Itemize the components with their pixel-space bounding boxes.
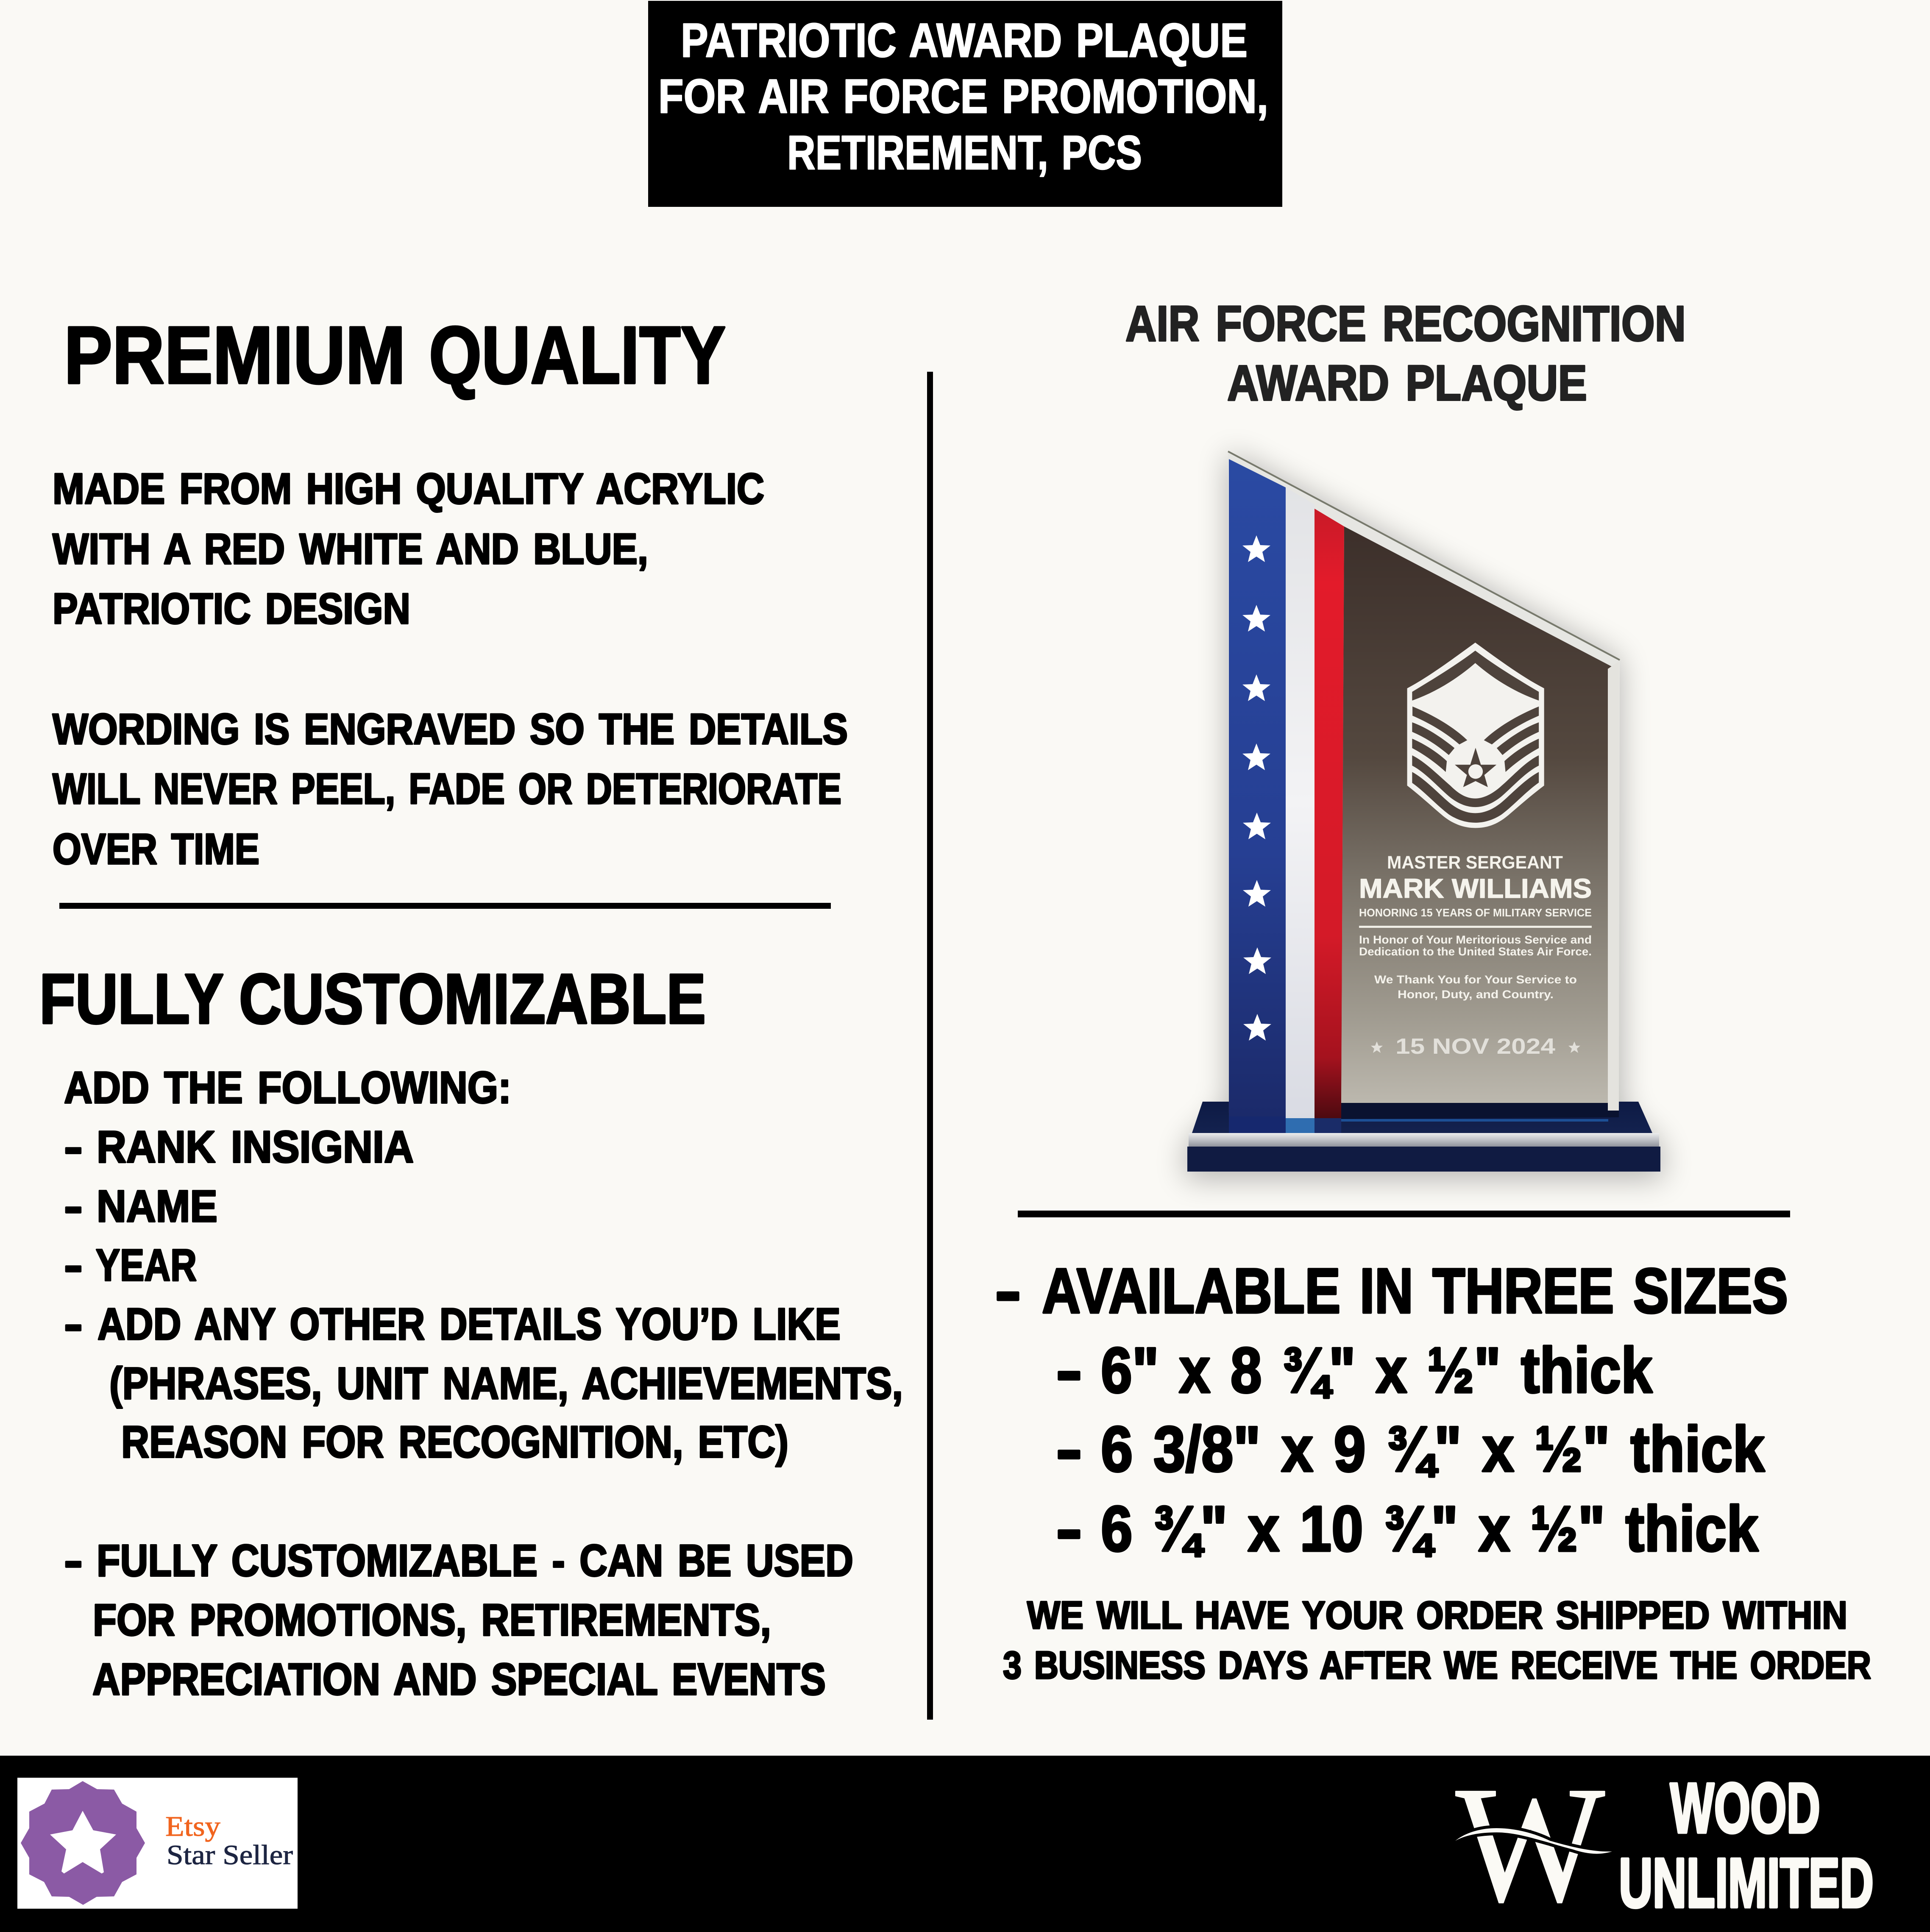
engraved text: In Honor of Your Meritorious Service and bbox=[1359, 933, 1592, 946]
text block: available sizes: 6 ¾" x 10 ¾" x ½" thick bbox=[1101, 1493, 1758, 1565]
icon: purple star badge bbox=[21, 1781, 145, 1905]
icon: serif W monogram: W bbox=[1456, 1752, 1606, 1932]
engraved text: HONORING 15 YEARS OF MILITARY SERVICE bbox=[1359, 906, 1592, 919]
text block: customization options: - bbox=[64, 1181, 83, 1231]
title banner: RETIREMENT, PCS bbox=[787, 126, 1142, 179]
wood unlimited logo bbox=[1455, 1752, 1874, 1932]
slanted top edge line bbox=[1228, 451, 1620, 660]
text block: customization options: REASON FOR RECOGNITION, ETC) bbox=[121, 1417, 788, 1467]
white stripe bbox=[1286, 487, 1315, 1118]
heading: premium quality bbox=[64, 309, 726, 401]
plaque base bbox=[1187, 1102, 1660, 1172]
text block: customization options: FULLY CUSTOMIZABLE - CAN BE USED bbox=[97, 1536, 853, 1586]
panel lower shadow gap bbox=[1341, 1103, 1619, 1119]
blue stripe bbox=[1229, 459, 1286, 1116]
star seller label: Star Seller bbox=[167, 1840, 293, 1871]
engraved text: Honor, Duty, and Country. bbox=[1398, 988, 1554, 1001]
red stripe bbox=[1315, 509, 1344, 1118]
etsy label: Etsy bbox=[165, 1811, 221, 1842]
engraved text: Dedication to the United States Air Force. bbox=[1359, 945, 1592, 958]
heading: premium quality: QUALITY bbox=[429, 309, 726, 401]
text block: customization options: ADD ANY OTHER DETAILS YOU’D LIKE bbox=[97, 1299, 841, 1349]
right edge highlight bbox=[1608, 661, 1619, 1111]
wordmark: WOOD bbox=[1670, 1769, 1820, 1848]
acrylic award plaque photo bbox=[1185, 451, 1664, 1178]
stars column bbox=[1242, 535, 1271, 1041]
engraved panel bbox=[1341, 526, 1614, 1103]
text block: available sizes: - bbox=[1056, 1334, 1082, 1406]
text block: material description: WILL NEVER PEEL, FADE OR DETERIORATE bbox=[53, 765, 841, 813]
engraved text bbox=[1359, 852, 1592, 1059]
heading: product name: AWARD PLAQUE bbox=[1227, 355, 1587, 411]
plaque shadow bbox=[1185, 451, 1664, 1178]
text block: material description: OVER TIME bbox=[53, 825, 259, 873]
heading: fully customizable: FULLY CUSTOMIZABLE bbox=[39, 960, 706, 1038]
text block: customization options: - bbox=[64, 1299, 83, 1349]
text block: available sizes: 6 3/8" x 9 ¾" x ½" thick bbox=[1101, 1413, 1765, 1485]
heading: product name bbox=[1125, 296, 1686, 411]
text block: customization options: NAME bbox=[97, 1181, 217, 1231]
text block: shipping note bbox=[1003, 1594, 1871, 1687]
text block: customization options bbox=[64, 1063, 903, 1704]
text block: available sizes: - bbox=[1056, 1493, 1082, 1565]
text block: material description bbox=[53, 465, 848, 873]
footer bar bbox=[0, 1756, 1930, 1932]
text block: shipping note: WE WILL HAVE YOUR ORDER SHIPPED WITHIN bbox=[1027, 1594, 1847, 1637]
text block: customization options: ADD THE FOLLOWING: bbox=[64, 1063, 511, 1113]
etsy star seller badge bbox=[17, 1778, 298, 1909]
text block: customization options: - bbox=[64, 1240, 83, 1290]
text block: available sizes: - bbox=[1056, 1413, 1082, 1485]
title banner bbox=[648, 1, 1282, 207]
engraved text: MARK WILLIAMS bbox=[1359, 873, 1592, 904]
engraved text: 15 NOV 2024 bbox=[1395, 1034, 1555, 1059]
text block: material description: PATRIOTIC DESIGN bbox=[53, 585, 410, 633]
text block: customization options: (PHRASES, UNIT NAME, ACHIEVEMENTS, bbox=[109, 1359, 903, 1409]
text block: customization options: FOR PROMOTIONS, RETIREMENTS, bbox=[93, 1595, 771, 1645]
rank insignia bbox=[1407, 643, 1544, 828]
acrylic silhouette bbox=[1228, 451, 1620, 1116]
text block: material description: WORDING IS ENGRAVED SO THE DETAILS bbox=[53, 705, 848, 753]
heading: premium quality: PREMIUM bbox=[64, 309, 406, 401]
text block: material description: WITH A RED WHITE AND BLUE, bbox=[53, 525, 648, 573]
engraved text: We Thank You for Your Service to bbox=[1374, 973, 1577, 986]
text block: available sizes: AVAILABLE IN THREE SIZES bbox=[1042, 1255, 1788, 1326]
text block: material description: MADE FROM HIGH QUALITY ACRYLIC bbox=[53, 465, 764, 513]
engraved text: MASTER SERGEANT bbox=[1387, 852, 1563, 873]
text block: customization options: APPRECIATION AND SPECIAL EVENTS bbox=[92, 1654, 826, 1704]
text block: available sizes: - bbox=[995, 1255, 1021, 1326]
title banner: FOR AIR FORCE PROMOTION, bbox=[658, 70, 1268, 123]
heading: product name: AIR FORCE RECOGNITION bbox=[1125, 296, 1686, 352]
text block: available sizes bbox=[995, 1255, 1788, 1565]
text block: customization options: YEAR bbox=[96, 1240, 197, 1290]
text block: customization options: - bbox=[64, 1122, 83, 1172]
title banner: PATRIOTIC AWARD PLAQUE bbox=[681, 14, 1248, 67]
text block: available sizes: 6" x 8 ¾" x ½" thick bbox=[1101, 1334, 1652, 1406]
text block: customization options: RANK INSIGNIA bbox=[97, 1122, 414, 1172]
text block: customization options: - bbox=[64, 1536, 83, 1586]
